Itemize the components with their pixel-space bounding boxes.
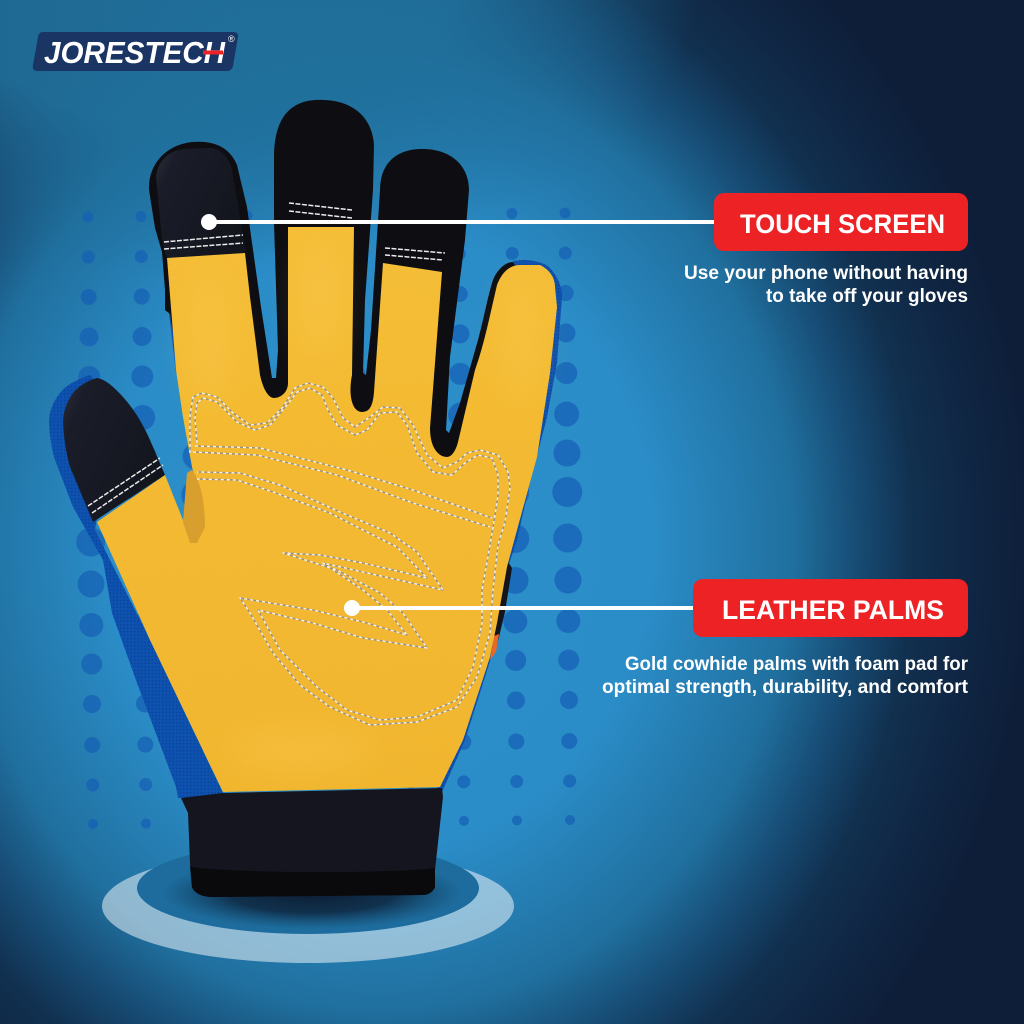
- glove: leather highlights: [190, 245, 540, 770]
- callout: touch screen pointer: [201, 214, 715, 230]
- glove: thumb touch leather: [63, 378, 165, 522]
- callout label: touch screen: TOUCH SCREEN: [740, 209, 945, 239]
- text: touch screen description: [684, 262, 968, 307]
- text: touch screen description: to take off your gloves: [766, 285, 968, 307]
- callout: leather palms pointer: [344, 600, 695, 616]
- glove: blue mesh rim on the right: [430, 260, 562, 792]
- glove: black side patch: [488, 562, 512, 652]
- glove: black wrist cuff: [181, 788, 443, 897]
- glove: blue thumb and side mesh: [49, 375, 225, 798]
- text: leather palms description: Gold cowhide palms with foam pad for: [625, 653, 968, 675]
- logo: ®: [228, 34, 235, 44]
- floor ring: [102, 842, 514, 963]
- glove: cuff hem: [190, 866, 435, 897]
- logo: JORESTECH: [44, 35, 226, 70]
- glove: gold leather palm: [97, 227, 557, 792]
- glove: inner thumb fold: [183, 470, 205, 543]
- callout label: leather palms: [693, 579, 968, 637]
- glove: blue strip on outer finger: [168, 305, 188, 372]
- callout label: touch screen: [714, 193, 968, 251]
- glove: black fabric fingers: [149, 100, 540, 500]
- glove: outer fingertip touch leather: [156, 148, 246, 259]
- glove: palm stitching shadow: [190, 383, 510, 725]
- glove: orange tag: [490, 634, 499, 660]
- text: touch screen description: Use your phone without having: [684, 262, 968, 284]
- halftone dot pattern: [88, 213, 572, 824]
- callout label: leather palms: LEATHER PALMS: [722, 595, 944, 625]
- glove: [49, 100, 562, 897]
- glove: palm stitching white: [190, 383, 510, 725]
- text: leather palms description: [602, 653, 968, 698]
- glove: fingertip stitching: [88, 203, 445, 513]
- text: leather palms description: optimal strength, durability, and comfort: [602, 676, 968, 698]
